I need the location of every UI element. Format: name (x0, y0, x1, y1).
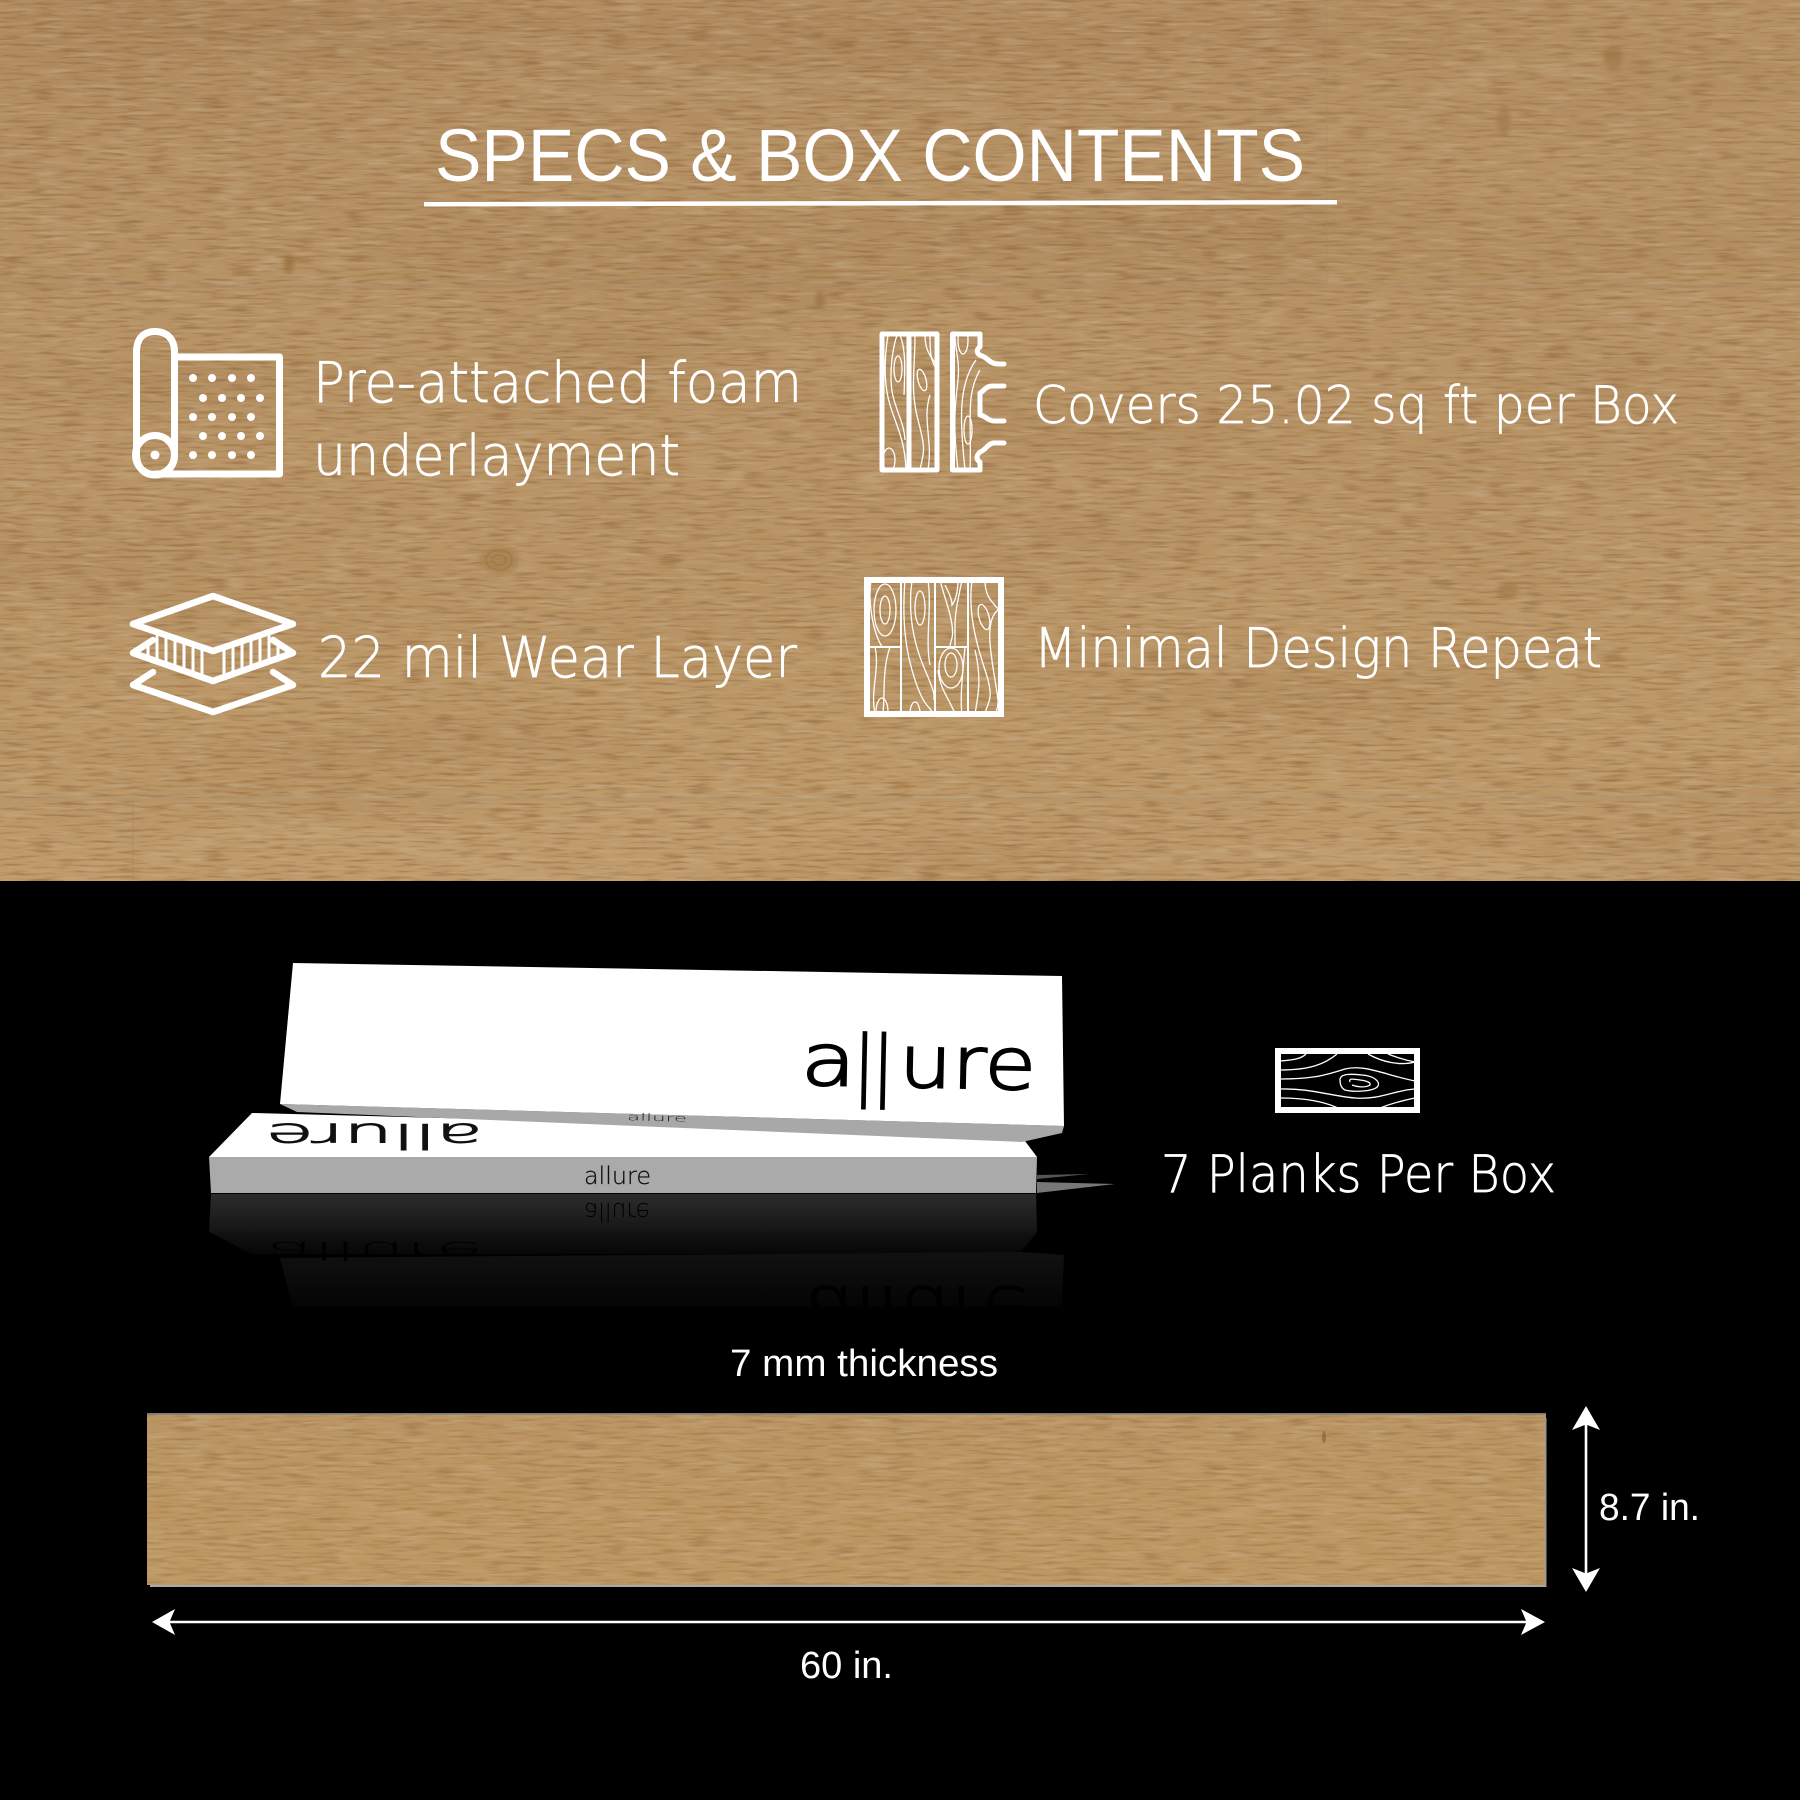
feature: coverage per box (882, 326, 1679, 472)
logo: allure: ll (854, 1015, 894, 1133)
text: wear layer: 22 mil Wear Layer (318, 626, 797, 691)
icon: wood pattern tile (866, 580, 1001, 726)
arrow: width dimension (152, 1609, 1545, 1635)
icon: foam roll (136, 332, 280, 475)
label: thickness: 7 mm thickness (730, 1343, 998, 1385)
lower box: allure (266, 1115, 483, 1155)
label: width: 60 in. (800, 1645, 893, 1687)
reflection of boxes: allure (266, 1236, 483, 1264)
feature: minimal design repeat (866, 580, 1602, 726)
feature: pre-attached foam underlayment (136, 332, 802, 489)
icon: interlocking planks (882, 326, 1004, 472)
text: design repeat: Minimal Design Repeat (1034, 617, 1602, 680)
text: planks per box: 7 Planks Per Box (1161, 1145, 1556, 1205)
reflection of boxes: allure (584, 1196, 650, 1226)
label: height: 8.7 in. (1599, 1487, 1700, 1529)
arrow: height dimension (1572, 1406, 1600, 1592)
panel: black lower section (0, 881, 1800, 1800)
text: foam underlayment: underlayment (313, 424, 680, 489)
text: coverage: Covers 25.02 sq ft per Box (1033, 376, 1679, 436)
reflection of boxes: allure (805, 1270, 1031, 1352)
product boxes with reflection (209, 963, 1115, 1352)
plank sample (147, 1413, 1546, 1587)
shadow streaks (1037, 1174, 1115, 1193)
lower box (209, 1113, 1037, 1193)
feature: wear layer (133, 596, 797, 712)
upper box (280, 963, 1064, 1142)
title: SPECS & BOX CONTENTS (435, 114, 1305, 197)
knot marks (150, 33, 1700, 881)
logo: allure: ure (898, 1020, 1037, 1106)
icon: stacked layers (133, 596, 293, 712)
reflection of boxes (209, 1194, 1064, 1352)
logo: allure: a (800, 1018, 857, 1103)
panel: wood floor background (0, 0, 1800, 881)
text: foam underlayment: Pre-attached foam (313, 351, 802, 416)
text: foam underlayment (313, 351, 802, 489)
lower box: allure (584, 1162, 651, 1190)
upper box: allure (627, 1112, 687, 1125)
callout: planks per box (1161, 1051, 1556, 1205)
icon: wood plank (1278, 1051, 1417, 1110)
logo: allure (800, 1014, 1037, 1136)
